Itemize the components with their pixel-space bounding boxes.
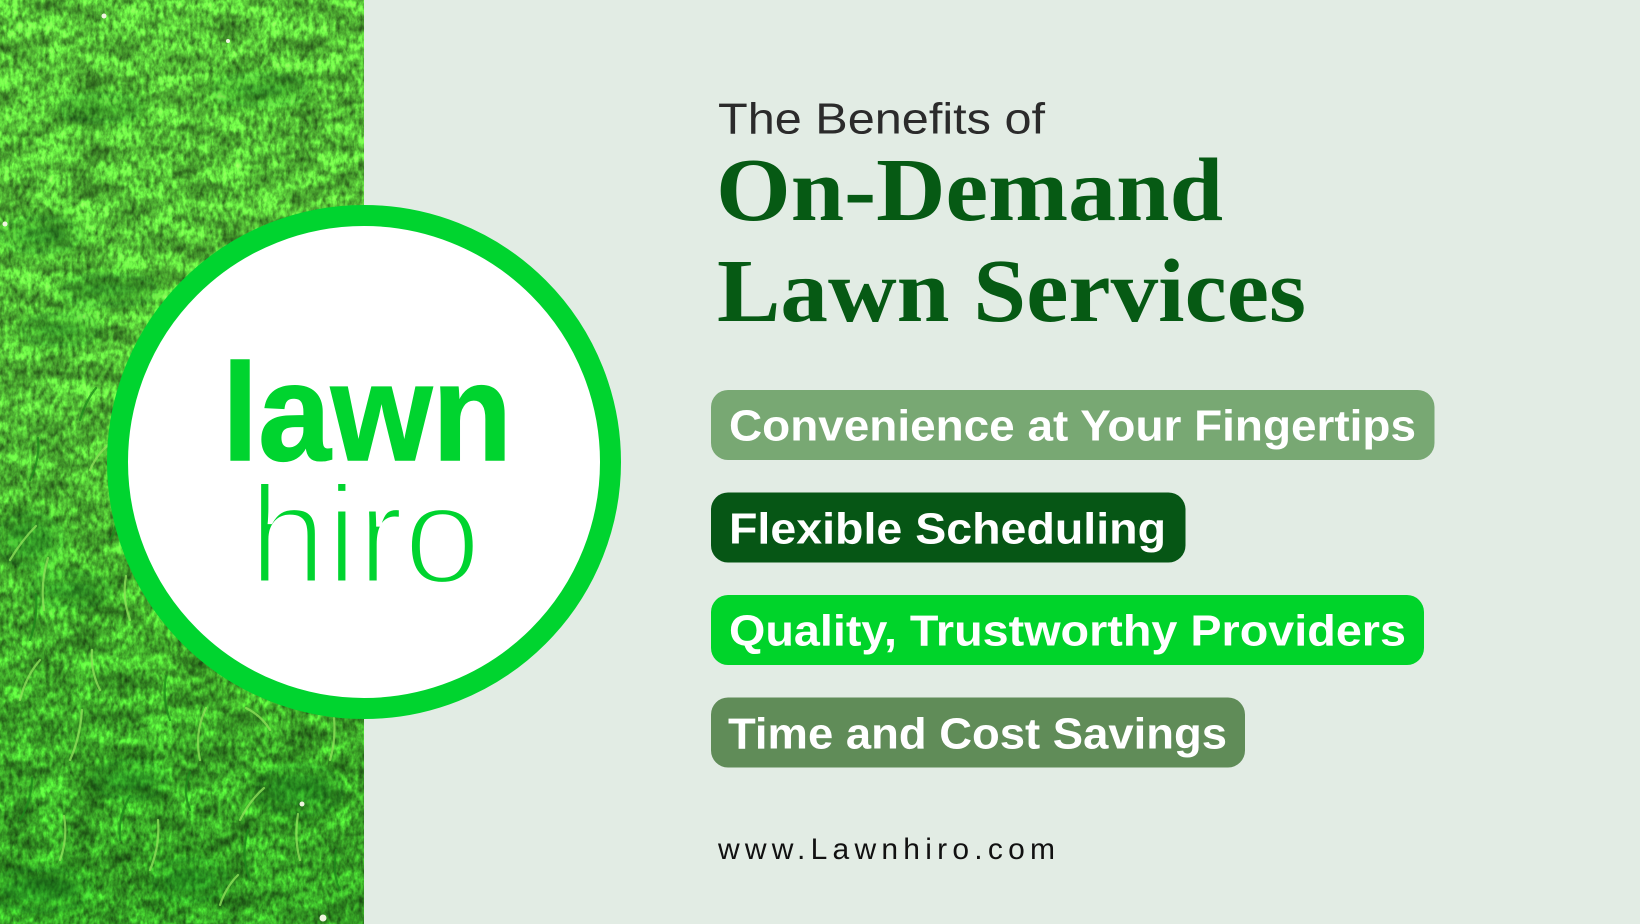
benefit pill: flexible scheduling bbox=[711, 492, 1186, 562]
logo circle bbox=[118, 216, 610, 708]
website url: www.Lawnhiro.com bbox=[717, 833, 1055, 866]
main title bbox=[716, 141, 1306, 341]
logo word: hiro: hiro bbox=[249, 456, 481, 613]
benefit pill: convenience bbox=[711, 390, 1434, 460]
main title: Lawn Services bbox=[717, 242, 1306, 341]
benefit pill: time and cost bbox=[711, 698, 1245, 768]
logo word: lawn: lawn bbox=[222, 336, 512, 490]
benefit pill: time and cost: Time and Cost Savings bbox=[728, 710, 1227, 758]
benefit pill: quality providers: Quality, Trustworthy Providers bbox=[729, 606, 1406, 656]
heading intro: The Benefits of bbox=[718, 94, 1046, 144]
benefit pill: quality providers bbox=[711, 595, 1424, 665]
grass photo panel bbox=[0, 0, 364, 924]
benefit pill: convenience: Convenience at Your Fingertips bbox=[729, 402, 1416, 450]
benefit pill: flexible scheduling: Flexible Scheduling bbox=[729, 504, 1166, 554]
main title: On-Demand bbox=[716, 141, 1223, 240]
